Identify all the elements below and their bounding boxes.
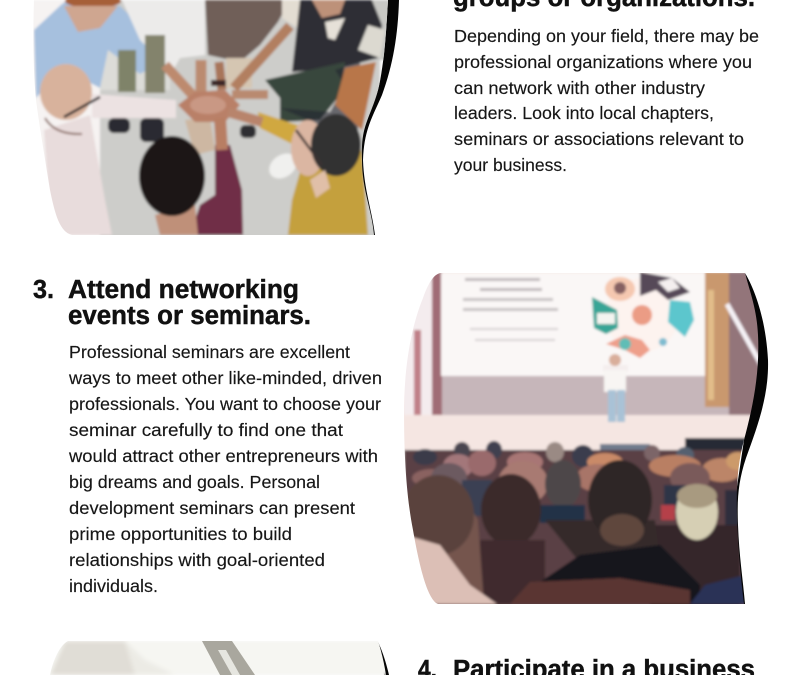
text block: professional organizations: leaders. Look into local chapters, xyxy=(454,103,714,123)
text block: professional seminars: development seminars can present xyxy=(69,498,355,518)
text block: professional seminars: prime opportunities to build xyxy=(69,524,292,544)
black wave edge of seminar photo xyxy=(735,273,768,604)
text block: professional seminars: individuals. xyxy=(69,576,158,596)
photo: team stacking hands xyxy=(30,0,399,240)
photo: seminar audience and stage xyxy=(400,270,770,610)
heading: 3. attend networking events or seminars xyxy=(33,276,311,330)
black wave edge of office photo xyxy=(378,642,389,675)
text block: professional organizations xyxy=(454,26,759,175)
text block: professional seminars: professionals. You want to choose your xyxy=(69,394,381,414)
text block: professional seminars xyxy=(68,342,382,596)
black wave edge of team photo xyxy=(360,0,399,235)
text block: professional seminars: big dreams and goals. Personal xyxy=(69,472,320,492)
text block: professional seminars: would attract other entrepreneurs with xyxy=(68,446,378,466)
heading: 3. attend networking events or seminars: 3. xyxy=(33,276,54,304)
heading: 3. attend networking events or seminars: events or seminars. xyxy=(68,302,311,330)
ceiling beam xyxy=(202,641,255,675)
text block: professional organizations: your business. xyxy=(454,155,567,175)
photo: office ceiling partially visible xyxy=(45,640,390,675)
text block: professional organizations: Depending on your field, there may be xyxy=(454,26,759,46)
text block: professional organizations: seminars or associations relevant to xyxy=(454,129,744,149)
text block: professional organizations: can network with other industry xyxy=(454,78,705,98)
text block: professional seminars: Professional seminars are excellent xyxy=(69,342,350,362)
text block: professional seminars: ways to meet other like-minded, driven xyxy=(68,368,382,388)
text block: professional seminars: relationships with goal-oriented xyxy=(69,550,325,570)
text block: professional seminars: seminar carefully to find one that xyxy=(69,420,343,440)
heading: 3. attend networking events or seminars: Attend networking xyxy=(68,276,299,304)
text block: professional organizations: professional organizations where you xyxy=(454,52,752,72)
